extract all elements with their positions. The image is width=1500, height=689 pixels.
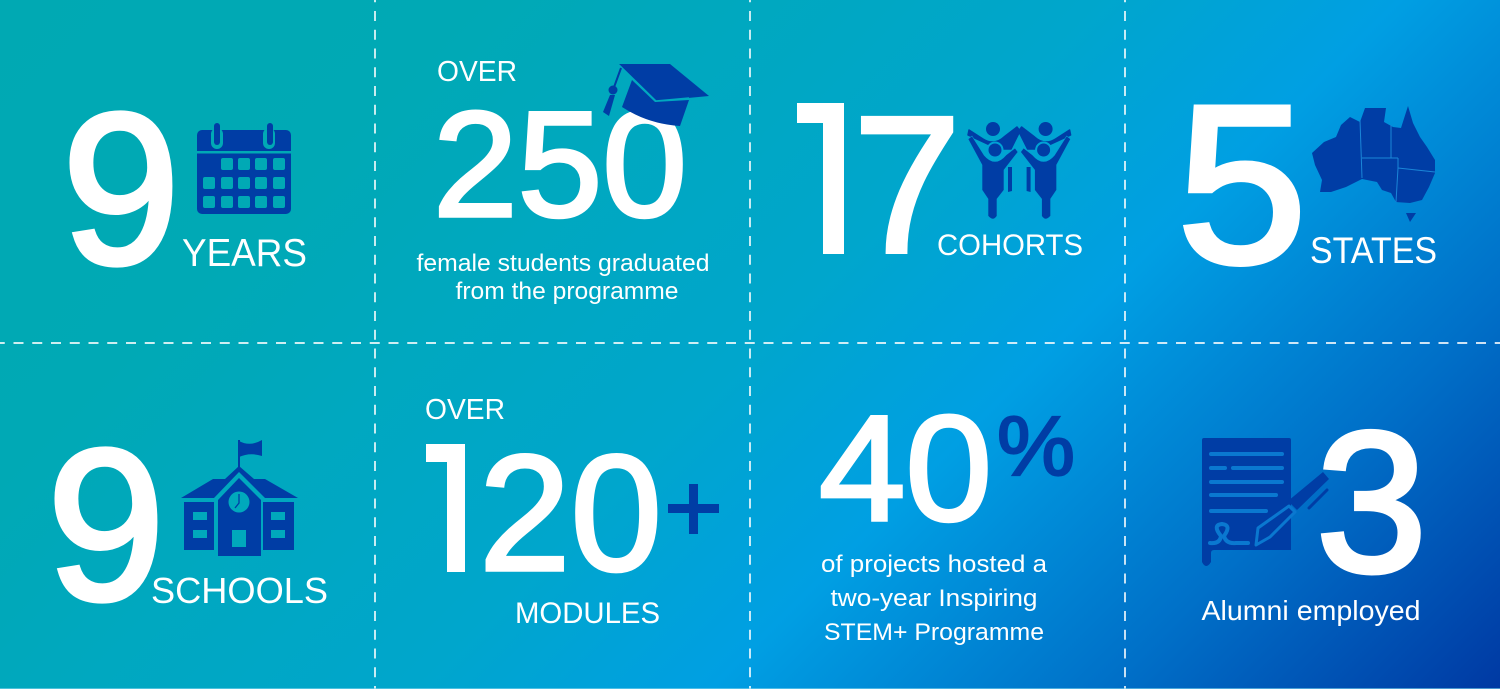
icon: calendar (197, 123, 291, 214)
number 120: 1 (405, 415, 501, 607)
number 9: 9 (47, 404, 165, 645)
icon: map of Australia (1312, 106, 1435, 222)
caption: STEM+ Programme: STEM+ Programme (824, 619, 1044, 646)
label: modules: MODULES (515, 597, 660, 630)
panel: 17 cohorts (797, 103, 1082, 256)
number 17: 7 (853, 76, 961, 294)
label: cohorts: COHORTS (937, 229, 1083, 262)
label: schools: SCHOOLS (151, 570, 328, 611)
label: states: STATES (1310, 230, 1437, 271)
icon: school building (181, 440, 298, 556)
caption: female students: female students graduated (416, 250, 710, 277)
caption: from the programme: from the programme (456, 278, 678, 305)
number 17 (797, 103, 954, 254)
panel: 3 alumni employed (1202, 391, 1427, 626)
caption: alumni employed: Alumni employed (1202, 595, 1420, 626)
number 17: 1 (772, 69, 885, 296)
number 120: 20 (479, 421, 662, 605)
panel: 9 years (62, 68, 307, 309)
panel: over 250 graduates (416, 56, 710, 305)
panel: over 120+ modules (426, 398, 719, 624)
panel: 5 states (1177, 58, 1437, 310)
caption: two-year Inspiring: two-year Inspiring (830, 585, 1038, 612)
number 40: 40 (819, 384, 992, 552)
icon: signed document and pen (1202, 438, 1329, 566)
percent sign: % (997, 399, 1075, 493)
panel: 9 schools (47, 404, 328, 645)
panel: 40 percent (819, 384, 1075, 646)
caption: of projects hosted a: of projects hosted a (821, 551, 1048, 578)
icon: plus sign (668, 484, 719, 534)
number 9: 9 (62, 68, 180, 309)
icon: graduation cap (603, 64, 709, 126)
label: over: OVER (425, 394, 505, 426)
number 250: 250 (433, 80, 687, 248)
number 120 (426, 444, 658, 574)
label: over: OVER (437, 56, 517, 88)
number 3: 3 (1316, 391, 1427, 614)
label: years: YEARS (182, 232, 307, 275)
number 5: 5 (1177, 58, 1307, 310)
icon: people group (968, 122, 1071, 219)
